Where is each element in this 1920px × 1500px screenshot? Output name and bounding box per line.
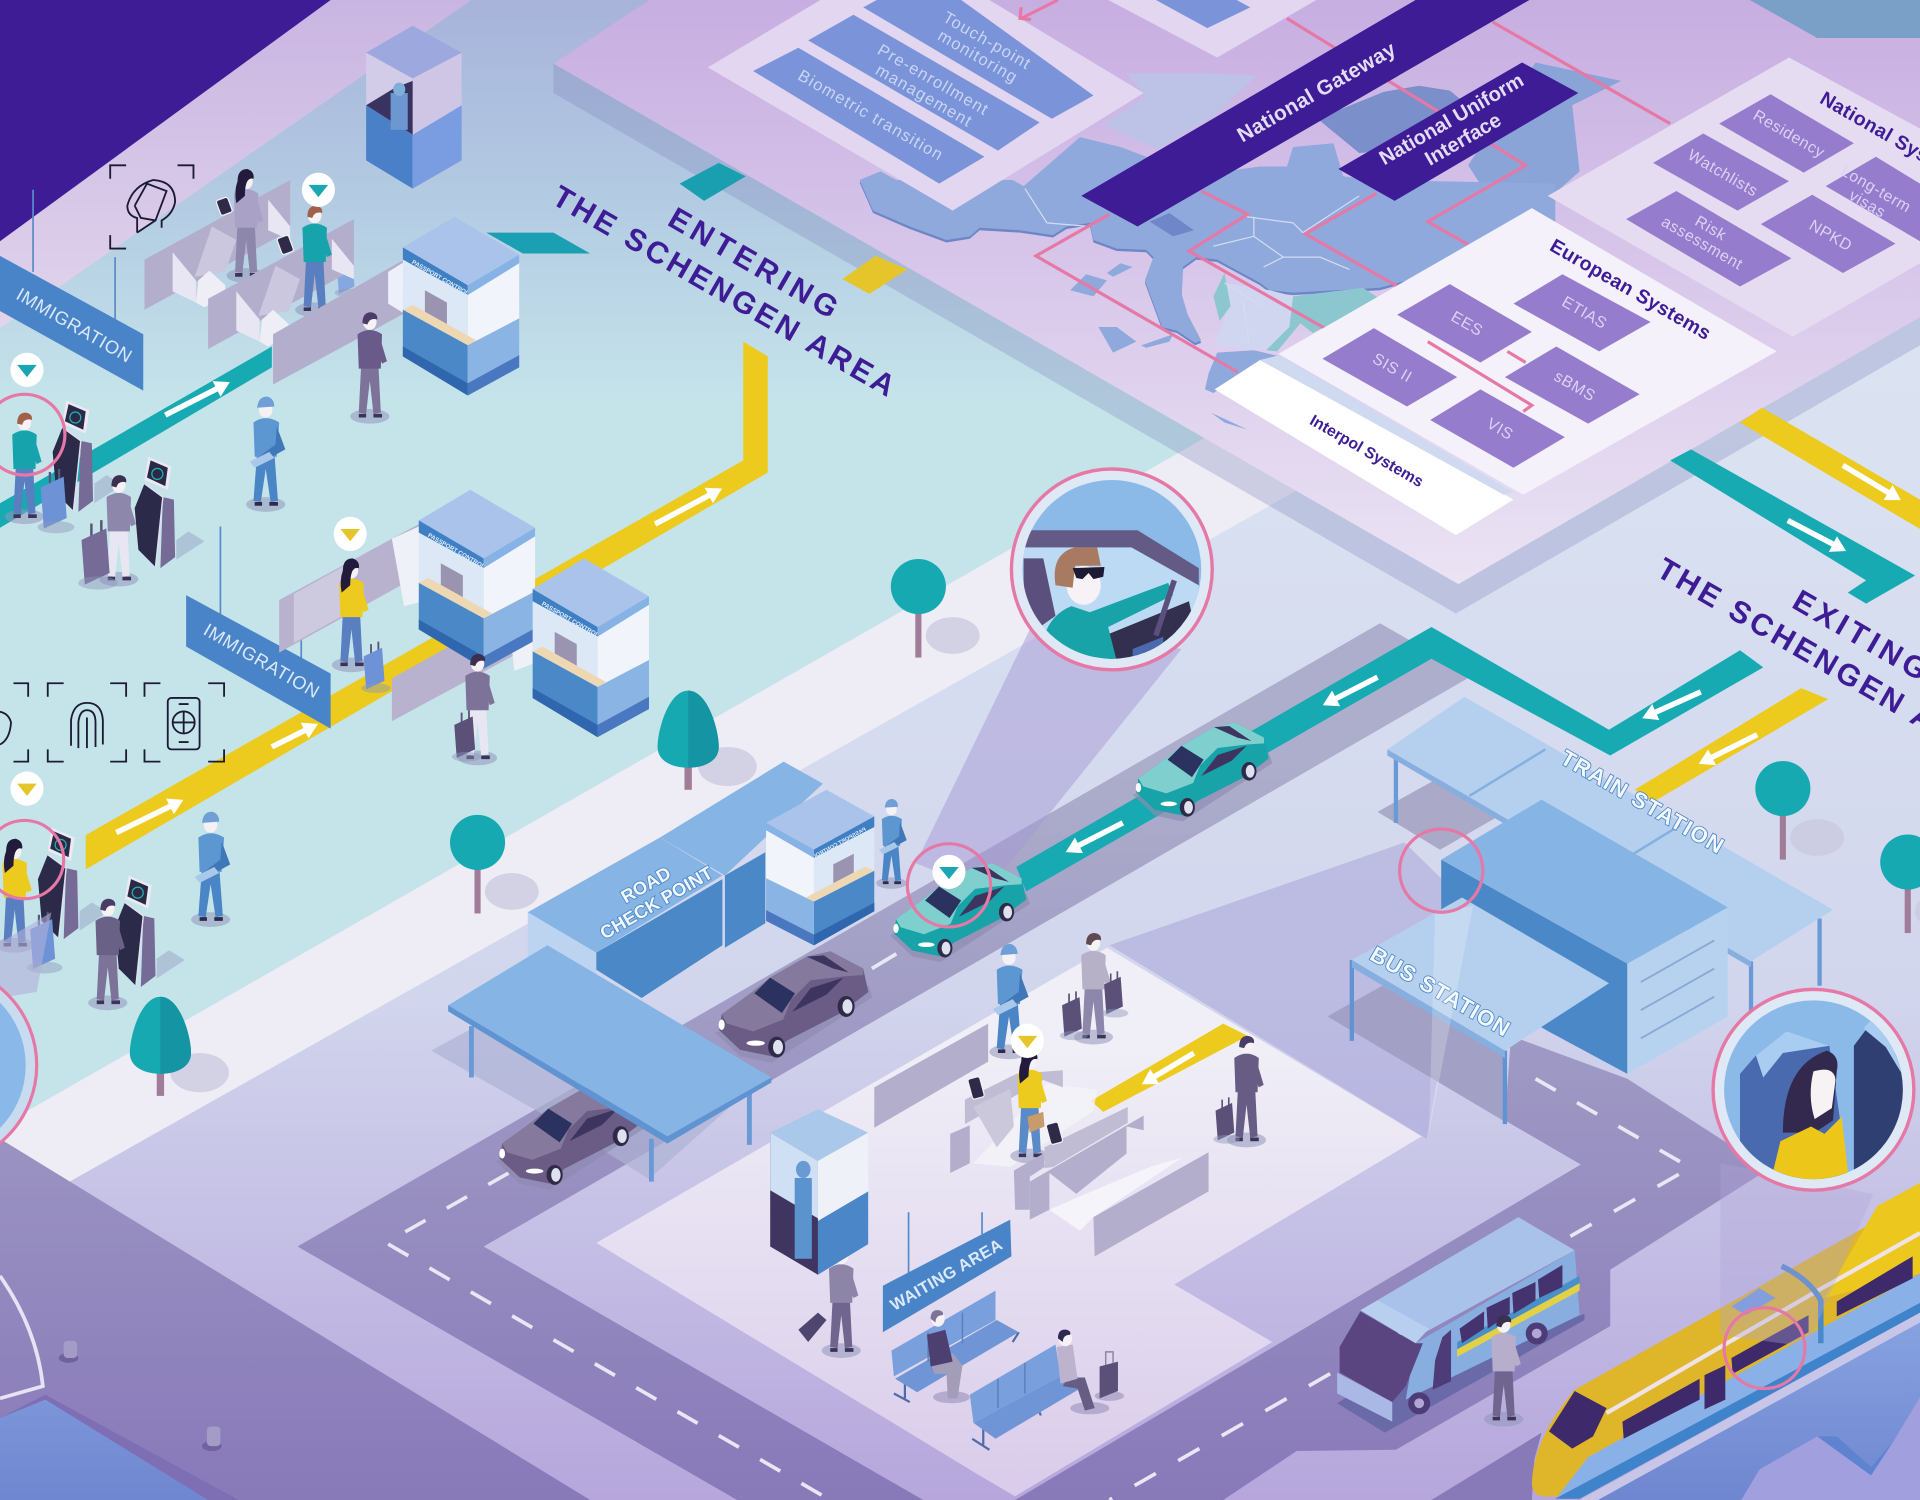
highlight circle on station <box>1400 829 1483 912</box>
icon: face recognition bracket <box>110 165 193 249</box>
panel: European Systems: SIS II <box>1369 350 1415 386</box>
bus station: BUS STATION <box>1366 941 1514 1041</box>
panel: National Systems: visas <box>1846 187 1888 222</box>
plaza wall far <box>874 1024 988 1128</box>
panel: European Systems: VIS <box>1484 415 1516 444</box>
signs: immigration lower <box>186 527 331 729</box>
canopy <box>448 945 771 1182</box>
bench front <box>970 1344 1080 1450</box>
icon: fingerprint bracket <box>48 683 126 762</box>
callout markers <box>10 173 367 806</box>
panel: European Systems: ETIAS <box>1559 294 1610 333</box>
map of Europe <box>860 62 1621 430</box>
guard at road <box>876 799 907 889</box>
panel: European Systems: European Systems <box>1546 235 1715 345</box>
gates lower <box>279 524 539 721</box>
cone: train callout <box>1720 1163 1873 1347</box>
train <box>1532 1183 1920 1499</box>
icon: partial head bracket <box>0 683 28 762</box>
road check point: ROAD <box>617 862 674 907</box>
pink connector lines <box>1036 18 1670 372</box>
bus <box>1337 1217 1584 1433</box>
bench rear <box>891 1291 1019 1402</box>
teal exit path top <box>1670 449 1915 604</box>
bottom-left water <box>0 1395 239 1500</box>
train highlight circle <box>1724 1308 1805 1389</box>
teal entry path <box>0 347 272 528</box>
road car callout <box>907 844 991 927</box>
seated traveller front <box>1057 1330 1109 1414</box>
panel: National Systems: Residency <box>1750 107 1828 162</box>
station road <box>1015 1036 1768 1500</box>
plaza <box>596 948 1422 1496</box>
cone: driver callout <box>916 627 1182 891</box>
panel: biometric services: Biometric transition <box>795 66 947 165</box>
teal floor marker <box>486 233 590 253</box>
yellow plaza path <box>1091 1024 1248 1112</box>
sign: waiting area: WAITING AREA <box>887 1235 1006 1315</box>
person by bus <box>1484 1315 1523 1427</box>
bar: National Gateway <box>1081 0 1529 227</box>
road strip by the train <box>1431 1433 1542 1500</box>
pink arrow <box>1020 0 1058 20</box>
seated traveller rear <box>927 1310 970 1403</box>
panel: National Systems: assessment <box>1658 213 1745 274</box>
plaza gate rear with traveller <box>950 1049 1097 1173</box>
guard booth plaza <box>770 1109 868 1275</box>
panel: top partial panel <box>1108 0 1316 58</box>
left partial circle <box>0 912 51 1166</box>
plaza gate front <box>1014 1107 1209 1256</box>
bridge and water <box>1580 1313 1920 1500</box>
road check point: CHECK POINT <box>596 861 717 943</box>
bus station <box>1327 898 1609 1124</box>
walking traveller <box>798 1247 861 1358</box>
platform colour markers <box>680 163 907 294</box>
panel: National Systems <box>1548 58 1920 337</box>
top-right blue corner <box>1750 0 1920 38</box>
kiosks <box>38 400 204 987</box>
panel: Interpol Systems <box>1215 355 1513 535</box>
platform shadow <box>553 0 1920 613</box>
panel: biometric services <box>708 0 1144 211</box>
icon: passport bracket <box>144 683 224 762</box>
signs: immigration upper: IMMIGRATION <box>13 283 136 367</box>
callout marker in plaza <box>1011 1024 1044 1058</box>
road check point <box>528 762 823 1016</box>
people behind plaza gates <box>989 933 1266 1147</box>
bar: National Uniform Interface: Interface <box>1421 109 1505 170</box>
train passenger circle <box>1713 989 1914 1190</box>
heading: entering: ENTERING <box>662 201 844 325</box>
station light beam <box>1429 906 1473 1133</box>
panel: European Systems <box>1278 208 1777 495</box>
panel: National Systems: Risk <box>1692 213 1729 244</box>
yellow entry path <box>86 342 768 869</box>
biometric gates with travellers <box>144 169 409 384</box>
panel: National Systems: NPKD <box>1806 217 1855 255</box>
sign: waiting area <box>883 1212 1011 1332</box>
guard kiosk booth top <box>366 26 462 189</box>
trees <box>130 559 1920 1096</box>
bar: National Uniform Interface <box>1338 62 1578 201</box>
yellow exit path lower <box>1635 688 1828 802</box>
panel: European Systems: EES <box>1448 308 1486 340</box>
bollards <box>59 1341 222 1451</box>
booth: road control <box>766 790 874 945</box>
top-right system platform <box>553 0 1920 584</box>
bar: National Uniform Interface: National Uniform <box>1376 70 1528 170</box>
people entering <box>0 312 497 1010</box>
canopy shadow <box>431 986 729 1179</box>
path arrows <box>116 387 1892 1079</box>
dark purple corner block <box>0 0 331 241</box>
panel: National Systems: Long-term <box>1838 163 1914 216</box>
white walkway <box>0 437 1298 1183</box>
road dashes <box>388 954 1685 1500</box>
panel: biometric services: management <box>872 60 976 131</box>
driver circle <box>1011 469 1212 670</box>
panel: biometric services: monitoring <box>935 26 1021 87</box>
top-left lavender band <box>0 0 490 343</box>
highlight circles <box>0 394 65 899</box>
tunnel arch <box>0 1276 43 1398</box>
panel: biometric services: Pre-enrollment <box>874 40 992 119</box>
panel: National Systems: Watchlists <box>1685 147 1761 201</box>
train station <box>1378 697 1833 1016</box>
cars <box>496 722 1272 1190</box>
bar: National Gateway: National Gateway <box>1233 38 1400 147</box>
luggage by bench <box>1095 1352 1124 1401</box>
lower-left dark ground <box>0 1139 590 1500</box>
cone: station callout <box>1109 842 1469 1139</box>
main road <box>298 623 1472 1500</box>
panel: biometric services: Touch-point <box>940 8 1035 73</box>
yellow exit path top <box>1740 408 1920 529</box>
teal road path <box>1016 627 1763 891</box>
panel: Interpol Systems: Interpol Systems <box>1307 412 1426 491</box>
mint immigration floor <box>0 0 1237 1127</box>
station main building <box>1441 800 1728 1074</box>
heading: entering: THE SCHENGEN AREA <box>547 179 901 403</box>
booths passport control <box>403 217 649 737</box>
signs: immigration upper <box>0 190 143 391</box>
panel: European Systems: sBMS <box>1551 368 1598 405</box>
signs: immigration lower: IMMIGRATION <box>200 619 323 702</box>
train station: TRAIN STATION <box>1556 745 1728 858</box>
